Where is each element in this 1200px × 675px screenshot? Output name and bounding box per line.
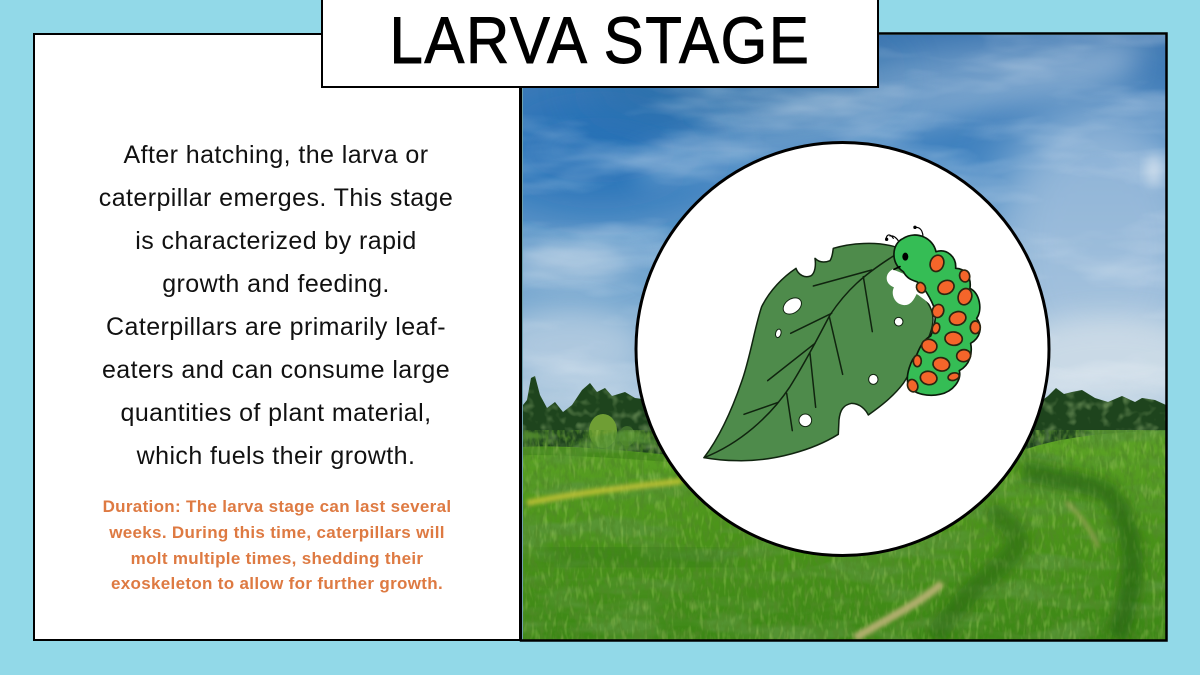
body text: eaters and can consume large xyxy=(102,356,450,384)
icon: caterpillar on a leaf xyxy=(704,226,980,461)
body text xyxy=(99,141,453,470)
leaf xyxy=(704,243,933,461)
body text: quantities of plant material, xyxy=(121,399,431,427)
photo: meadow and sky xyxy=(523,35,1166,640)
body text: which fuels their growth. xyxy=(137,442,415,470)
duration note: Duration: The larva stage can last several xyxy=(103,497,451,516)
duration note: molt multiple times, shedding their xyxy=(131,549,423,568)
duration note: weeks. During this time, caterpillars will xyxy=(109,523,445,542)
caterpillar xyxy=(885,226,980,395)
title xyxy=(321,0,879,88)
panel: text background xyxy=(33,33,521,641)
body text: Caterpillars are primarily leaf- xyxy=(106,313,446,341)
body text: caterpillar emerges. This stage xyxy=(99,184,453,212)
duration note xyxy=(103,497,451,593)
title: LARVA STAGE xyxy=(389,4,811,77)
body text: is characterized by rapid xyxy=(135,227,417,255)
photo frame xyxy=(521,34,1166,640)
duration note: exoskeleton to allow for further growth. xyxy=(111,574,443,593)
illustration circle xyxy=(636,142,1049,556)
body text: After hatching, the larva or xyxy=(124,141,428,169)
body text: growth and feeding. xyxy=(162,270,390,298)
